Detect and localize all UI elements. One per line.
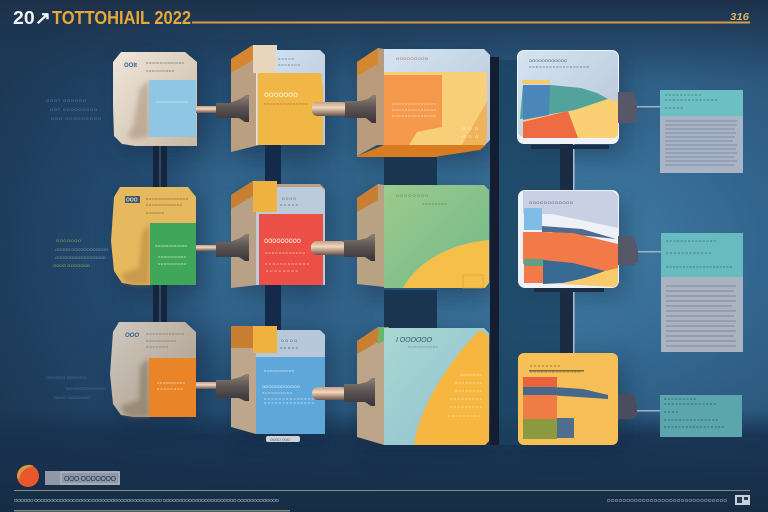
row 1 column 4 chart card: OOOOOOOOOOOOOOOOOO xyxy=(529,65,590,69)
side panel row 3: OOOOOOOOOOOOOO xyxy=(664,402,717,406)
row 3 column 2 box: OOOOOOOOOO xyxy=(262,391,293,395)
left note row 3: OOOOOOOOOOOO xyxy=(66,386,106,391)
row 3 column 3 box: OOOOOOOOO xyxy=(450,397,483,401)
row 1 column 2 box: OOOOOOO xyxy=(264,93,298,99)
left note row 1: OOT OOOOOOOOO xyxy=(50,107,97,112)
row 1 column 2 box: OOOOO xyxy=(278,57,295,61)
left note row 2: OOOOOOOOOOOOOOOOO xyxy=(55,255,106,260)
row 2 column 1 box: OOOOOOOOOOOO xyxy=(146,203,183,207)
row 1 column 3 box: OOOOOOOOO xyxy=(396,56,428,61)
row 3 column 4 chart card: OOOOOOOO xyxy=(530,364,561,368)
row 3 column 3 box: OOOOOOOO xyxy=(455,389,483,393)
footer QR icon xyxy=(735,495,750,505)
row 1 column 2 box: OOOOOOO xyxy=(278,63,301,67)
side panel row 2: OOOOOOOOOOOOOO xyxy=(666,239,717,243)
row 2 column 2 box xyxy=(231,181,325,288)
side panel row 3: OOOO xyxy=(664,410,679,414)
row 3 column 2 box: OOOOOOOOOOOO xyxy=(262,384,300,389)
left note row 2 xyxy=(53,238,108,268)
row 2 column 3 box: OOOOOOOO xyxy=(422,202,448,206)
row 3 column 2 box xyxy=(231,326,325,434)
header code: 316 xyxy=(730,12,749,23)
footer text left: OOOOOO OOOOOOOOOOOOOOOOOOOOOOOOOOOOOOOOOOOOOOOO OOOOOOOOOOOOOOOOOOOOOOO OOOOOOOOOOOOO xyxy=(14,498,279,503)
row 3 column 1 box: OOOOOOOOOO xyxy=(157,381,186,385)
left note row 2: OOOO OOOOOOO xyxy=(53,263,90,268)
row 3 column 3 box: OOOOOOOO xyxy=(455,381,483,385)
left note row 3 xyxy=(46,375,106,400)
row 3 column 4 chart card xyxy=(518,353,618,445)
row 3 column 3 box: OOOOOOOOO xyxy=(448,414,481,418)
row 3 column 1 box: OOOOOOOOOOOO xyxy=(146,332,185,336)
row 3 column 4 chart card: OOOOOOOOOOOOOO xyxy=(530,370,581,374)
side panel row 3: OOOOOOOOOOOOOOO xyxy=(664,418,719,422)
side panel row 3 xyxy=(660,395,742,437)
side panel row 3: OOOOOOOOOOOOOOOOO xyxy=(664,425,725,429)
side panel row 1: OOOOOOOOOO xyxy=(665,93,702,97)
row 1 column 4 chart card xyxy=(517,50,619,149)
title: TOTTOHIAIL 2022 xyxy=(52,8,191,28)
row 3 column 2 box: OOOOO xyxy=(280,346,299,350)
side panel row 2 xyxy=(661,233,743,352)
row 1 column 1 box xyxy=(113,52,197,146)
side panel row 1 xyxy=(660,90,743,173)
row 2 column 1 box: OOO xyxy=(126,198,138,204)
row connectors to side panels xyxy=(618,92,661,419)
row 1 column 1 box: OOOOOOOOOO xyxy=(146,69,175,73)
box shadows xyxy=(120,55,625,450)
row 3 column 2 box: OOOOOOOOOO xyxy=(264,369,295,373)
footer text right: OOOOOOOOOOOOOOOOOOOOOOOOOOOOOOO xyxy=(607,498,727,503)
row 2 column 3 box xyxy=(357,184,489,288)
row 2 column 2 box: OOOO xyxy=(282,197,296,201)
row 2 column 4 chart card xyxy=(518,190,619,292)
side panel row 2: OOOOOOOOOOOOOOOOOOOO xyxy=(666,265,733,269)
side panel row 1: OOOOO xyxy=(665,106,684,110)
row 2 column 4 chart card: OOOOOOOOOOOO xyxy=(529,200,573,205)
connectors: pipes between boxes xyxy=(196,95,376,406)
row 3 column 2 box: OOOOOOOOOOOOOO xyxy=(264,401,315,405)
row 2 column 1 box: OOOOOOOOOO xyxy=(158,262,187,266)
left note row 1: OOOT OOOOOO xyxy=(46,98,86,103)
row 3 column 3 box: I OOOOOO xyxy=(396,337,433,344)
row 1 column 3 box: OOOOOOOOOOOOOO xyxy=(392,114,437,118)
footer logo xyxy=(17,465,39,487)
side panel row 3: OOOOOOOOO xyxy=(664,397,697,401)
row 2 column 2 box: OOOOOOOO xyxy=(266,269,299,273)
row 2 column 3 box: OOOOOOOO xyxy=(396,193,428,198)
row 3 column 2 box: OOOO xyxy=(281,339,297,343)
row 1 column 1 box: OOOOOOOOOOOO xyxy=(156,100,189,104)
row 3 column 1 box: OOO xyxy=(125,333,139,339)
vertical support poles xyxy=(153,57,574,445)
row 3 column 1 box: OOOOOOOOOO xyxy=(146,339,177,343)
small floor label xyxy=(266,436,300,442)
row 2 column 2 box: OOOOO xyxy=(280,203,299,207)
header rule xyxy=(192,22,750,24)
row 2 column 2 box: OOOOOOOOOOOO xyxy=(265,262,310,266)
row 3 column 3 box: OOOOOOOOOO xyxy=(408,345,439,349)
footer rule xyxy=(14,490,750,491)
row 2 column 1 box: OOOOOOOOOOOO xyxy=(155,244,188,248)
row 2 column 2 box: OOOOOOOOOOOO xyxy=(265,251,306,255)
left note row 2: OOOOO OOOOOOOOOOOO xyxy=(55,247,108,252)
title: 20↗ xyxy=(13,8,51,28)
row 3 column 3 box: OOOOOOOO xyxy=(460,373,483,377)
row 1 column 3 box: OOOOOOOOOOOOOO xyxy=(392,108,437,112)
left note row 2: OOOOOOO xyxy=(56,238,81,243)
left note row 3: OOOO OOOOOOO xyxy=(54,395,90,400)
row 1 column 2 box xyxy=(231,45,325,152)
row 2 column 2 box: OOOOOOOOO xyxy=(264,239,301,245)
row 3 column 1 box xyxy=(110,322,196,417)
row 3 column 2 box: OOOOOOOOOOOOOO xyxy=(264,397,315,401)
footer badge: OOO OOOOOOO xyxy=(64,476,117,483)
left note row 3: OOOOOO OOOOOO xyxy=(46,375,86,380)
side panel row 1: OOOOOOOOOOOOOO xyxy=(665,98,718,102)
row 1 column 4 chart card: OOOOOOOOOOOO xyxy=(529,58,567,63)
row 3 column 3 box xyxy=(357,327,489,445)
small floor label: OOOO OOO xyxy=(270,438,290,442)
row 2 column 1 box: OOOOOOOOOO xyxy=(158,255,187,259)
row 3 column 1 box: OOOOOOOO xyxy=(157,387,184,391)
row 2 column 1 box: OOOOOO xyxy=(146,211,165,215)
row 1 column 1 box: OOOOOOOOOOOOOO xyxy=(146,61,185,65)
row 1 column 1 box: OOIt xyxy=(124,63,137,69)
footer badge xyxy=(45,471,120,485)
row 3 column 3 box: OOOOOOOOO xyxy=(450,405,483,409)
row 1 column 3 box xyxy=(357,48,490,157)
left note row 1: OOO OOOOOOOOO xyxy=(51,116,101,121)
row 1 column 3 box: OOO xyxy=(462,134,478,139)
left note row 1 xyxy=(46,98,101,121)
row 2 column 1 box xyxy=(111,187,196,285)
row 3 column 1 box: OOOOOOO xyxy=(146,345,169,349)
row 1 column 3 box: OOOOOOOOOOOOOO xyxy=(392,102,437,106)
row 1 column 3 box: OOO xyxy=(462,126,478,131)
footer bottom strip xyxy=(14,510,290,512)
row 2 column 1 box: OOOOOOOOOOOOOO xyxy=(146,197,189,201)
side panel row 2: OOOOOOOOOOOO xyxy=(666,251,712,255)
row 1 column 2 box: OOOOOOOOOOOOOO xyxy=(264,102,309,106)
